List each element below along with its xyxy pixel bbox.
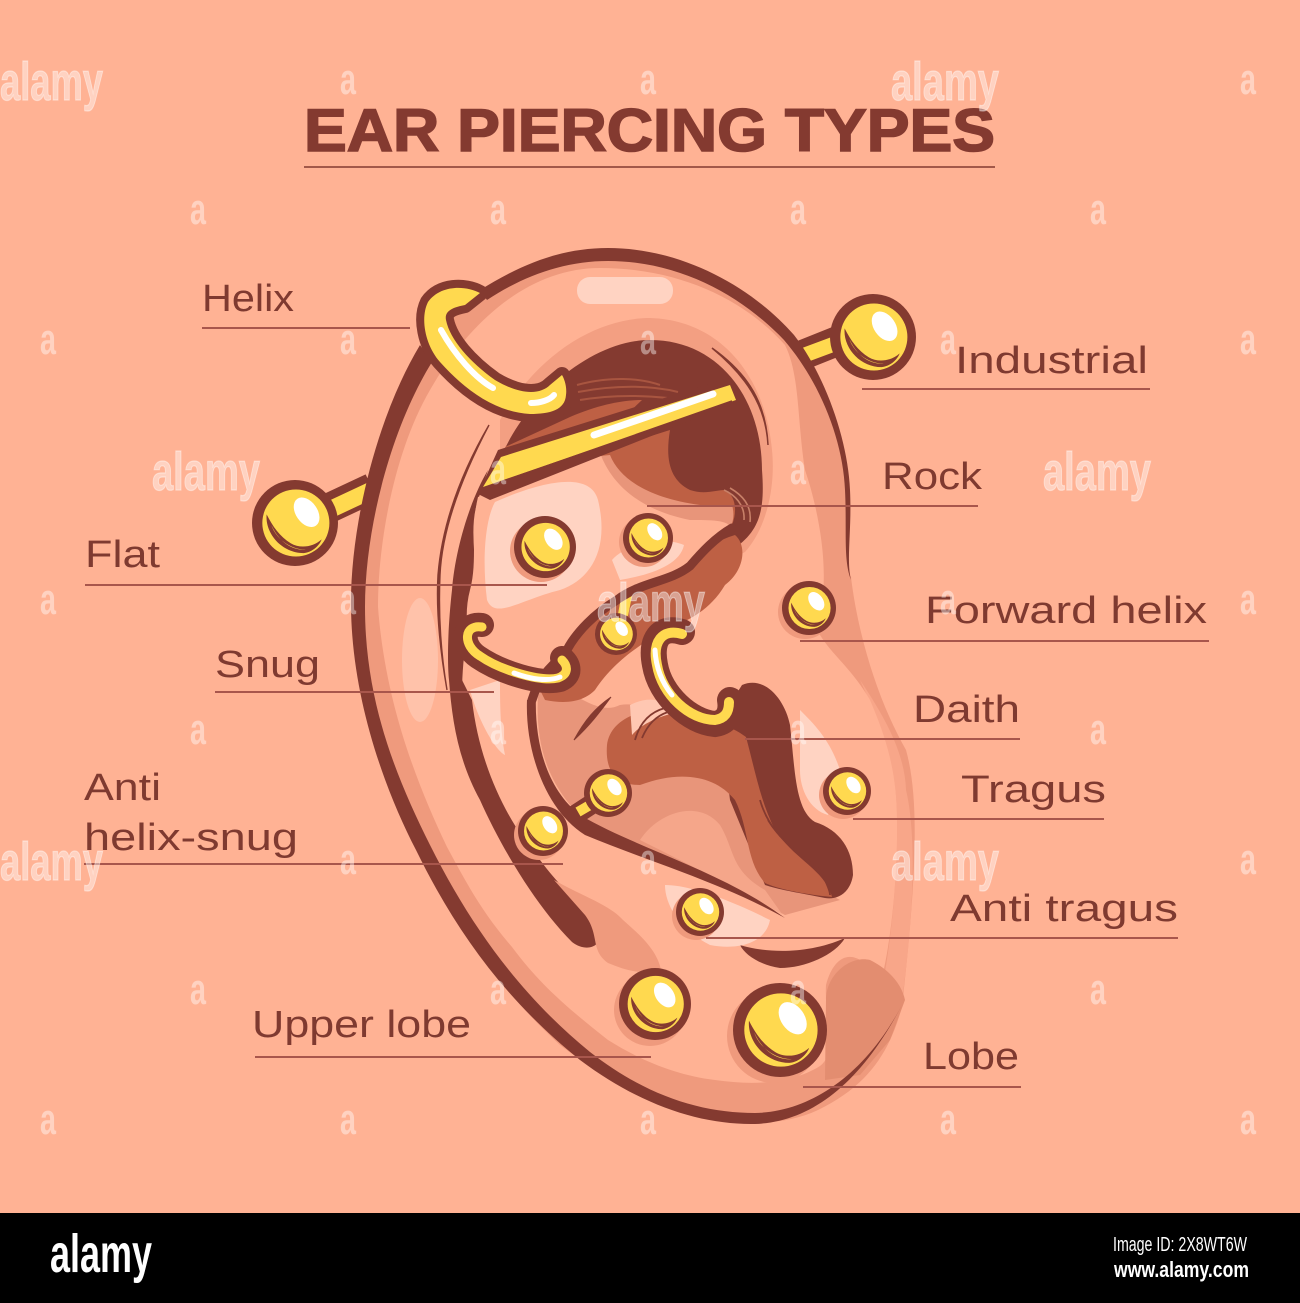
- mid fold under bar: [590, 455, 733, 560]
- watermarks: alamy: [0, 832, 103, 892]
- label: Anti helix-snug: [84, 767, 563, 864]
- upper cavity: [496, 340, 763, 548]
- watermarks: a: [640, 55, 656, 104]
- ball: inner snug: [595, 613, 637, 655]
- watermarks: alamy: [597, 573, 705, 633]
- label: Tragus: Tragus: [961, 769, 1106, 811]
- label: Lobe: Lobe: [923, 1036, 1019, 1078]
- concha light center: [640, 811, 782, 914]
- left industrial stem: [325, 488, 372, 512]
- antihelix edge: [532, 528, 732, 700]
- watermarks: a: [640, 835, 656, 884]
- watermarks: a: [190, 185, 206, 234]
- watermarks: a: [940, 575, 956, 624]
- watermarks: alamy: [152, 442, 260, 502]
- snug ring: [466, 625, 568, 681]
- rim highlights: [402, 277, 673, 755]
- inner rim shade: [500, 318, 773, 600]
- footer bar: Image ID: 2X8WT6W: [1113, 1234, 1247, 1256]
- scapha lower shade: [554, 880, 661, 972]
- watermarks: a: [1240, 315, 1256, 364]
- watermarks: a: [1240, 575, 1256, 624]
- label: Daith: Daith: [913, 689, 1020, 731]
- watermarks: a: [40, 575, 56, 624]
- watermarks: a: [490, 965, 506, 1014]
- antihelix skin: [467, 453, 730, 680]
- ball: anti helix snug: [518, 806, 568, 856]
- deep fold under bar: [590, 430, 735, 530]
- ball: upper concha: [584, 769, 632, 817]
- ear outline left and bottom: [351, 345, 902, 1124]
- ear outline top: [480, 248, 851, 580]
- footer bar: www.alamy.com: [1113, 1257, 1249, 1282]
- watermarks: a: [640, 315, 656, 364]
- watermarks: a: [40, 1095, 56, 1144]
- watermarks: a: [790, 965, 806, 1014]
- watermarks: a: [190, 965, 206, 1014]
- watermarks: a: [190, 705, 206, 754]
- tragus dark stripe: [720, 683, 853, 898]
- ball: lobe: [733, 983, 827, 1077]
- industrial bar: [478, 378, 742, 500]
- concha mid tone: [538, 688, 840, 915]
- label: Rock: Rock: [882, 456, 983, 498]
- lobe crescent: [740, 938, 845, 968]
- label: Anti tragus: Anti tragus: [950, 888, 1178, 930]
- label: Forward helix: Forward helix: [925, 590, 1207, 632]
- ball: tragus: [823, 767, 871, 815]
- lower right lighter band: [860, 680, 913, 1000]
- watermarks: a: [490, 445, 506, 494]
- label: Helix: Helix: [202, 278, 294, 320]
- watermarks: a: [340, 1095, 356, 1144]
- antihelix fold band: [540, 535, 742, 702]
- concha tapered line: [574, 697, 611, 740]
- stud stem: anti helix snug: [575, 800, 598, 815]
- helix ring: [424, 288, 566, 414]
- label: Flat: Flat: [85, 534, 161, 576]
- watermarks: a: [790, 185, 806, 234]
- watermarks: a: [1090, 705, 1106, 754]
- watermarks: a: [940, 1095, 956, 1144]
- fold hair lines: [724, 488, 750, 522]
- watermarks: a: [340, 575, 356, 624]
- upper cavity fold: [505, 400, 642, 470]
- watermarks: a: [940, 315, 956, 364]
- label: Anti helix-snug: Anti: [84, 767, 161, 809]
- concha deep fold: [607, 710, 832, 897]
- watermarks: a: [1090, 965, 1106, 1014]
- ball: flat: [514, 516, 576, 578]
- watermarks: a: [340, 835, 356, 884]
- concha hair lines: [635, 708, 668, 740]
- watermarks: a: [40, 315, 56, 364]
- watermarks: alamy: [891, 832, 999, 892]
- ball: rock: [623, 513, 673, 563]
- label: Upper lobe: Upper lobe: [252, 1004, 471, 1046]
- watermarks: alamy: [891, 52, 999, 112]
- lobe shade blob: [825, 959, 905, 1080]
- thin line beside cavity: [712, 348, 768, 445]
- ball: anti tragus: [676, 888, 724, 936]
- concha outline: [527, 695, 785, 918]
- inner concha pale fold: [630, 700, 680, 735]
- tragus hair lines: [760, 800, 830, 895]
- ball: upper lobe: [619, 968, 691, 1040]
- title: EAR PIERCING TYPES: [304, 97, 995, 164]
- ear lighter skin: [378, 268, 897, 1083]
- watermarks: alamy: [1043, 442, 1151, 502]
- ear illustration: [252, 248, 916, 1124]
- watermarks: a: [490, 185, 506, 234]
- label: Industrial: Industrial: [955, 340, 1148, 382]
- watermarks: a: [1240, 55, 1256, 104]
- scapha dark stripe: [437, 425, 600, 948]
- watermarks: alamy: [0, 52, 103, 112]
- cavity hair lines: [577, 379, 678, 400]
- watermarks: a: [340, 315, 356, 364]
- tragus and anti tragus highlights: [665, 710, 840, 947]
- watermarks: a: [1090, 185, 1106, 234]
- right industrial stem: [795, 338, 845, 358]
- ball shadows: [510, 517, 867, 1083]
- ball: forward helix: [782, 581, 836, 635]
- watermarks: a: [640, 1095, 656, 1144]
- watermarks: a: [790, 445, 806, 494]
- label: Anti helix-snug: helix-snug: [84, 817, 298, 859]
- watermarks: a: [490, 705, 506, 754]
- label: Snug: Snug: [215, 644, 320, 686]
- small gold fragment: [618, 596, 632, 616]
- footer bar: [0, 1213, 1300, 1303]
- ball: right industrial: [830, 294, 916, 380]
- watermarks: a: [790, 705, 806, 754]
- footer bar: alamy: [50, 1224, 152, 1284]
- ball: left industrial: [252, 480, 338, 566]
- ear base shape: [351, 254, 915, 1123]
- watermarks: a: [340, 55, 356, 104]
- antihelix highlights: [485, 482, 684, 609]
- watermarks: a: [1240, 1095, 1256, 1144]
- watermarks: a: [1240, 835, 1256, 884]
- daith ring: [654, 630, 730, 724]
